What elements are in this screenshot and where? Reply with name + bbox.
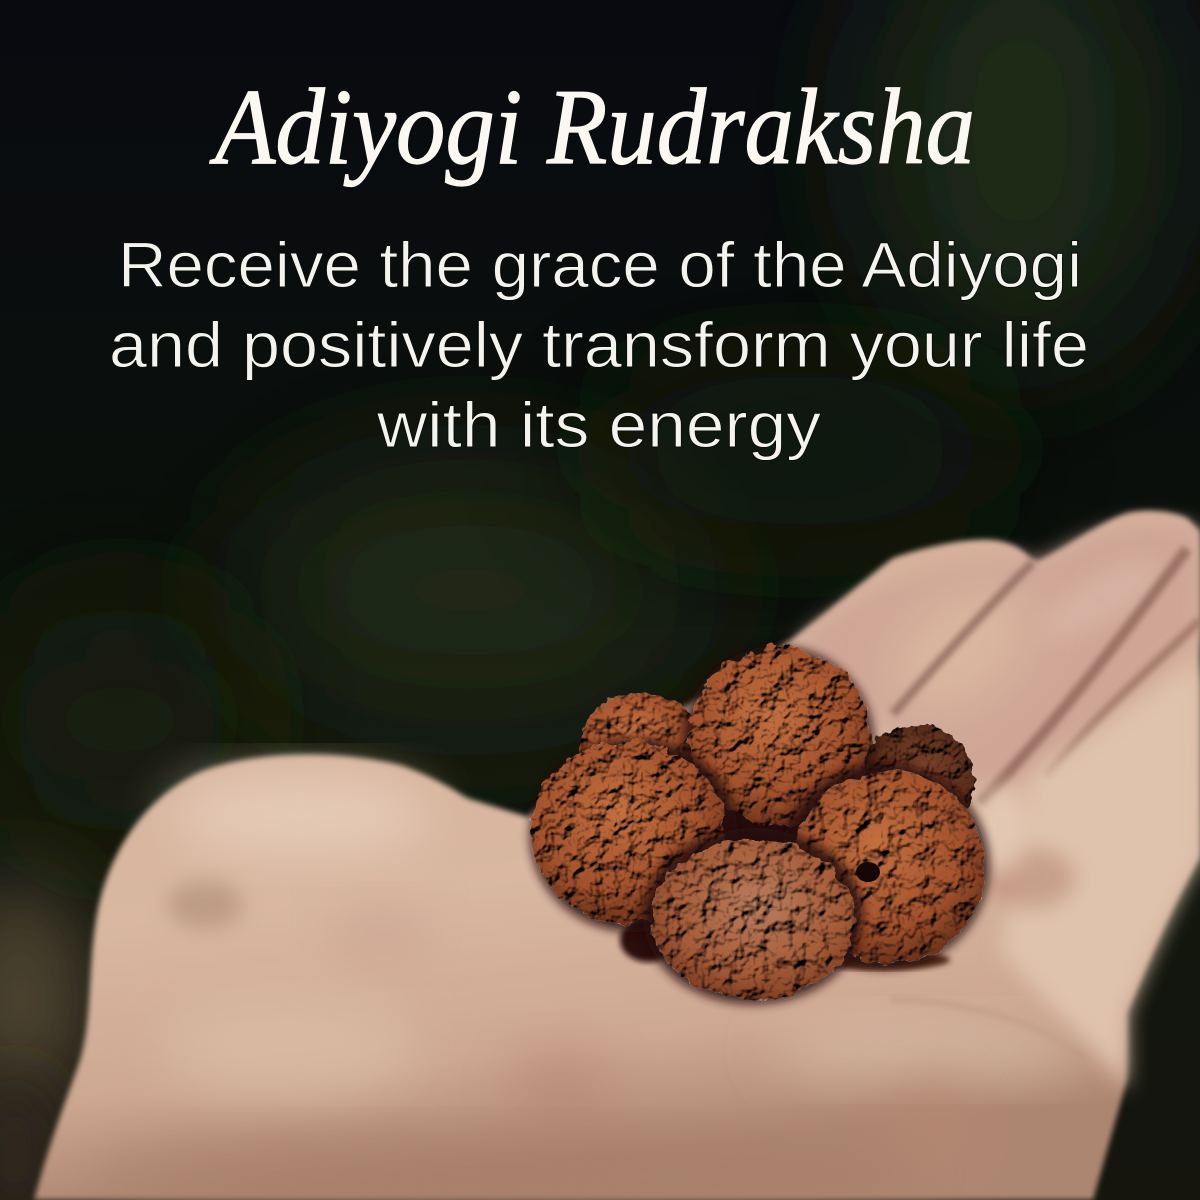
contact shadow: right bead <box>779 763 989 969</box>
hand photo <box>34 511 1200 1200</box>
subtitle <box>109 229 1089 461</box>
hand outline with fingers, palm and thumb mound <box>34 511 1200 1200</box>
bead: left <box>531 741 725 923</box>
rudraksha beads <box>530 646 989 1004</box>
dark hollow between beads <box>635 765 855 955</box>
bead: back right <box>855 725 975 835</box>
palm crease shade <box>985 848 1075 908</box>
heel of palm <box>890 1000 1085 1060</box>
subtitle: and positively transform your life <box>109 309 1089 381</box>
bead: back left <box>580 693 700 797</box>
shadow below left bead <box>620 918 676 962</box>
contact shadow: front bead <box>643 828 863 1004</box>
bead hole <box>856 862 880 882</box>
bead: right <box>791 772 985 964</box>
contact shadow: top bead <box>682 646 874 838</box>
finger tones <box>800 523 1200 800</box>
shadow below right bead <box>810 950 950 970</box>
title: Adiyogi Rudraksha <box>210 68 975 187</box>
finger highlights <box>866 561 1054 739</box>
subtitle: with its energy <box>376 389 821 461</box>
subtitle: Receive the grace of the Adiyogi <box>118 229 1082 301</box>
bead: front <box>651 840 855 1000</box>
thumb mound tones <box>170 775 430 855</box>
contact shadow: left bead <box>530 738 738 932</box>
finger creases <box>893 562 1033 714</box>
pinky mound <box>1000 665 1200 1090</box>
bead: top centre <box>690 646 870 826</box>
